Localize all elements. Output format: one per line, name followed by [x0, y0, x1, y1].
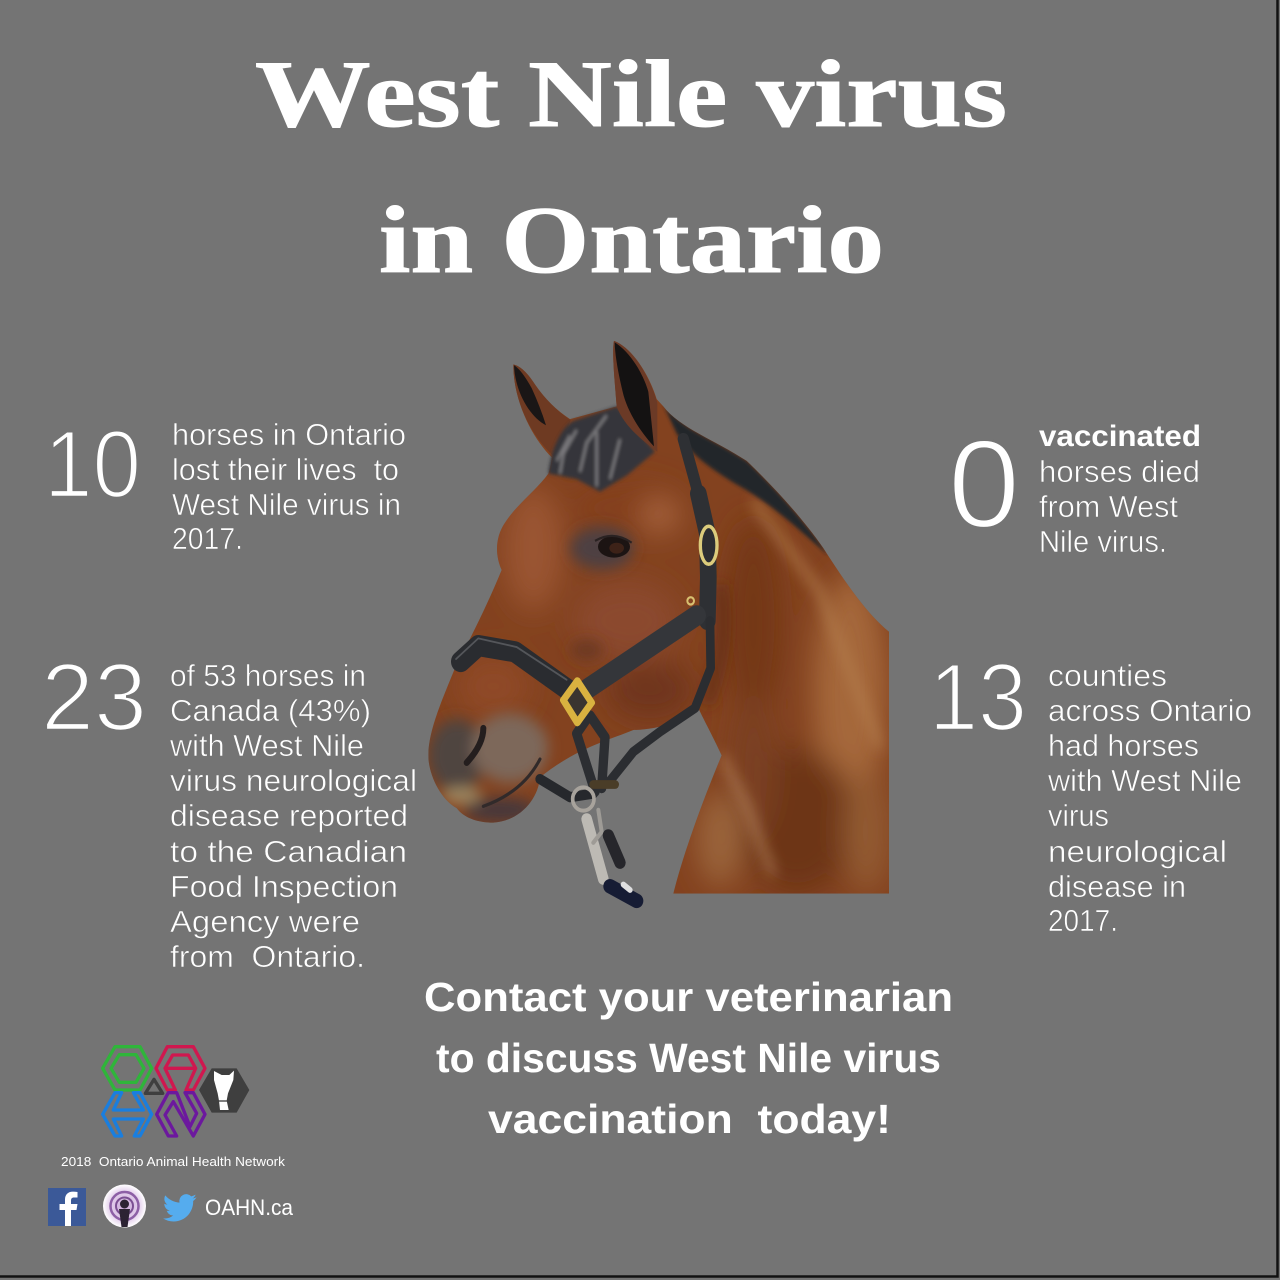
stat: 0 vaccinated horses: vaccinated — [1039, 420, 1201, 453]
stat: 10 horses: 10 — [44, 411, 141, 518]
stat: 10 horses: lost their lives to — [172, 453, 399, 487]
horse illustration — [420, 330, 900, 912]
icon: facebook — [48, 1188, 86, 1226]
stat: 23 of 53 horses: Canada (43%) — [170, 694, 371, 728]
title: West Nile virus — [255, 41, 1007, 147]
halter buckle — [563, 681, 592, 723]
logo letter O — [103, 1047, 152, 1090]
stat: 0 vaccinated horses: horses died — [1039, 455, 1200, 489]
stat: 13 counties: 13 — [929, 644, 1027, 751]
eye — [595, 536, 632, 558]
stat: 23 of 53 horses: with West Nile — [169, 729, 364, 763]
cheek ring buckle — [687, 526, 717, 605]
stat: 13 counties: disease in — [1048, 870, 1186, 904]
logo letter A — [156, 1047, 205, 1090]
nostril and mouth — [467, 728, 540, 806]
icon: podcast — [103, 1184, 146, 1228]
stat: 23 of 53 horses — [41, 644, 417, 974]
stat: 23 of 53 horses: from Ontario. — [170, 940, 365, 974]
stat: 10 horses — [44, 411, 406, 556]
title: in Ontario — [379, 187, 884, 293]
copyright line: 2018 Ontario Animal Health Network — [61, 1154, 286, 1169]
stat: 23 of 53 horses: Food Inspection — [170, 870, 398, 904]
stat: 23 of 53 horses: virus neurological — [170, 764, 417, 798]
stat: 23 of 53 horses: disease reported — [170, 799, 408, 833]
stat: 10 horses: 2017. — [172, 522, 243, 556]
stat: 13 counties: 2017. — [1048, 904, 1118, 938]
horse head and neck — [420, 330, 900, 912]
icon: twitter — [163, 1194, 197, 1221]
halter straps — [456, 439, 711, 797]
right ear — [613, 341, 657, 452]
lead clip and rope — [573, 784, 637, 901]
logo triangle — [145, 1079, 163, 1093]
call to action: vaccination today! — [488, 1096, 891, 1142]
call to action: to discuss West Nile virus — [436, 1035, 941, 1081]
logo letter H — [103, 1093, 152, 1136]
stat: 0 vaccinated horses — [948, 415, 1201, 559]
stat: 10 horses: horses in Ontario — [172, 418, 406, 452]
call to action — [424, 974, 953, 1142]
stat: 13 counties: had horses — [1048, 729, 1199, 763]
stat: 0 vaccinated horses: from West — [1039, 490, 1179, 524]
stat: 23 of 53 horses: 23 — [41, 644, 147, 751]
call to action: Contact your veterinarian — [424, 974, 953, 1020]
stat: 13 counties — [929, 644, 1252, 938]
stat: 0 vaccinated horses: Nile virus. — [1039, 525, 1167, 559]
stat: 23 of 53 horses: Agency were — [170, 905, 360, 939]
stat: 23 of 53 horses: to the Canadian — [170, 835, 407, 869]
stat: 13 counties: virus — [1048, 799, 1109, 833]
OAHN logo — [103, 1047, 249, 1136]
stat: 13 counties: neurological — [1048, 835, 1227, 869]
stat: 13 counties: with West Nile — [1047, 764, 1242, 798]
mane crest — [663, 405, 828, 555]
stat: 13 counties: counties — [1048, 659, 1167, 693]
stat: 10 horses: West Nile virus in — [172, 488, 401, 522]
title — [255, 41, 1007, 293]
logo letter N — [157, 1093, 205, 1136]
stat: 23 of 53 horses: of 53 horses in — [170, 659, 366, 693]
left ear — [513, 365, 571, 457]
forelock — [548, 406, 655, 492]
website link: OAHN.ca — [205, 1195, 294, 1220]
logo horse hexagon — [199, 1068, 249, 1113]
stat: 0 vaccinated horses: 0 — [948, 415, 1020, 554]
stat: 13 counties: across Ontario — [1048, 694, 1252, 728]
